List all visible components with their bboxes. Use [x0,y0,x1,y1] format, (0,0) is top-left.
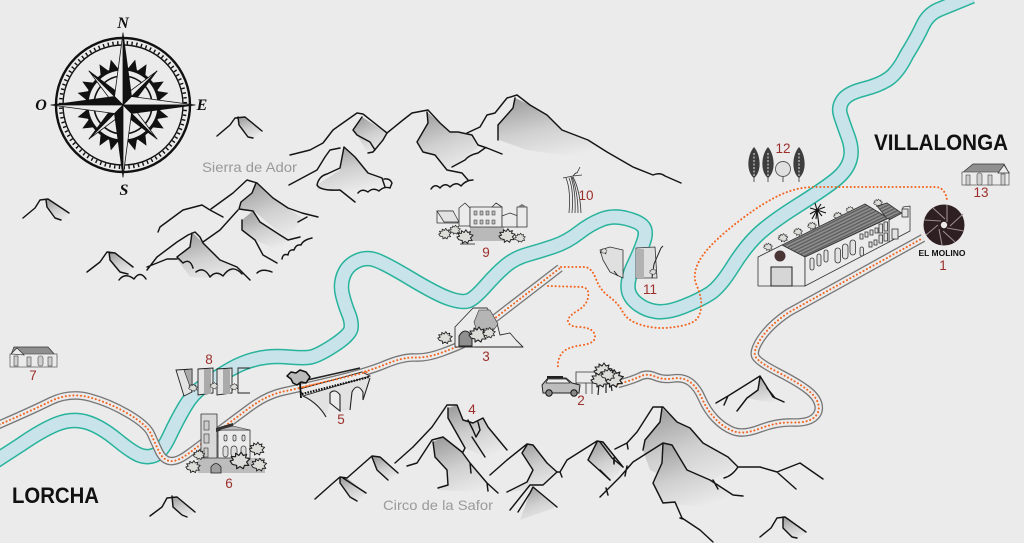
number 11: 11 [643,282,657,297]
small mountain bottom right [760,517,806,540]
bushes behind building [764,199,882,250]
small mountain left of Sierra [87,252,133,275]
town label: Lorcha: LORCHA [12,483,99,508]
windows [810,209,908,270]
road: Lorcha to tunnel [0,268,560,461]
area label: Sierra de Ador: Sierra de Ador [202,159,297,175]
place label: 1 El Molino building [758,199,910,286]
mountain in road bend [716,376,785,411]
label: El Molino: EL MOLINO [918,248,966,258]
road: car park to El Molino [618,238,923,433]
illustration: railway bridge [287,368,370,417]
dotted trail: to car park [548,286,595,368]
illustration: 12 trees [748,147,805,182]
mountains: Circo de la Safor central [490,441,623,520]
compass letter N: N [116,15,130,32]
number 6: 6 [225,476,233,491]
illustration: 11 gorge rocks [600,246,663,278]
number 5: 5 [337,412,345,427]
compass letter O: O [35,97,47,114]
number 9: 9 [482,245,490,260]
area label: Circo de la Safor: Circo de la Safor [383,497,493,513]
number 4: 4 [468,402,476,417]
dotted trail: across river to El Molino [561,187,947,328]
small mountain south of Lorcha road [150,496,195,518]
front wall [758,245,805,286]
illustration: car and sign [542,372,595,396]
number 8: 8 [205,352,213,367]
number 13: 13 [973,185,989,200]
illustration: house 7 [10,347,57,367]
number 7: 7 [29,368,37,383]
rosette [774,250,786,262]
door [771,267,792,286]
building roof [782,204,888,257]
number 12: 12 [775,141,791,156]
icon: palm tree [810,203,826,226]
annex roof [877,203,903,220]
illustration: trees at car park [591,363,623,395]
illustration: house 13 [962,164,1009,185]
small mountain far left [23,199,69,221]
compass rose [51,33,195,177]
town label: Villalonga: VILLALONGA [874,130,1008,155]
icon: El Molino aperture logo [924,204,964,246]
illustration: castle and church [186,414,267,473]
illustration: tunnel and rock [438,308,523,347]
compass letter E: E [196,97,207,114]
number 10: 10 [578,188,594,203]
number 3: 3 [482,349,490,364]
side wall [805,218,889,286]
compass letter S: S [120,182,129,199]
number 1: 1 [939,258,947,273]
mountains: Sierra de Ador central [289,95,681,202]
illustration: 9 village [437,203,527,244]
illustration: 10 waterfall [563,167,582,213]
mountains: Circo de la Safor east [600,407,823,542]
small mountain near compass [217,117,262,139]
mountains: Sierra de Ador west [119,180,318,280]
mountains: Circo de la Safor west [315,405,507,502]
illustration: 8 VVC gorge walls [176,368,250,396]
annex wall [889,206,910,242]
number 2: 2 [577,393,585,408]
